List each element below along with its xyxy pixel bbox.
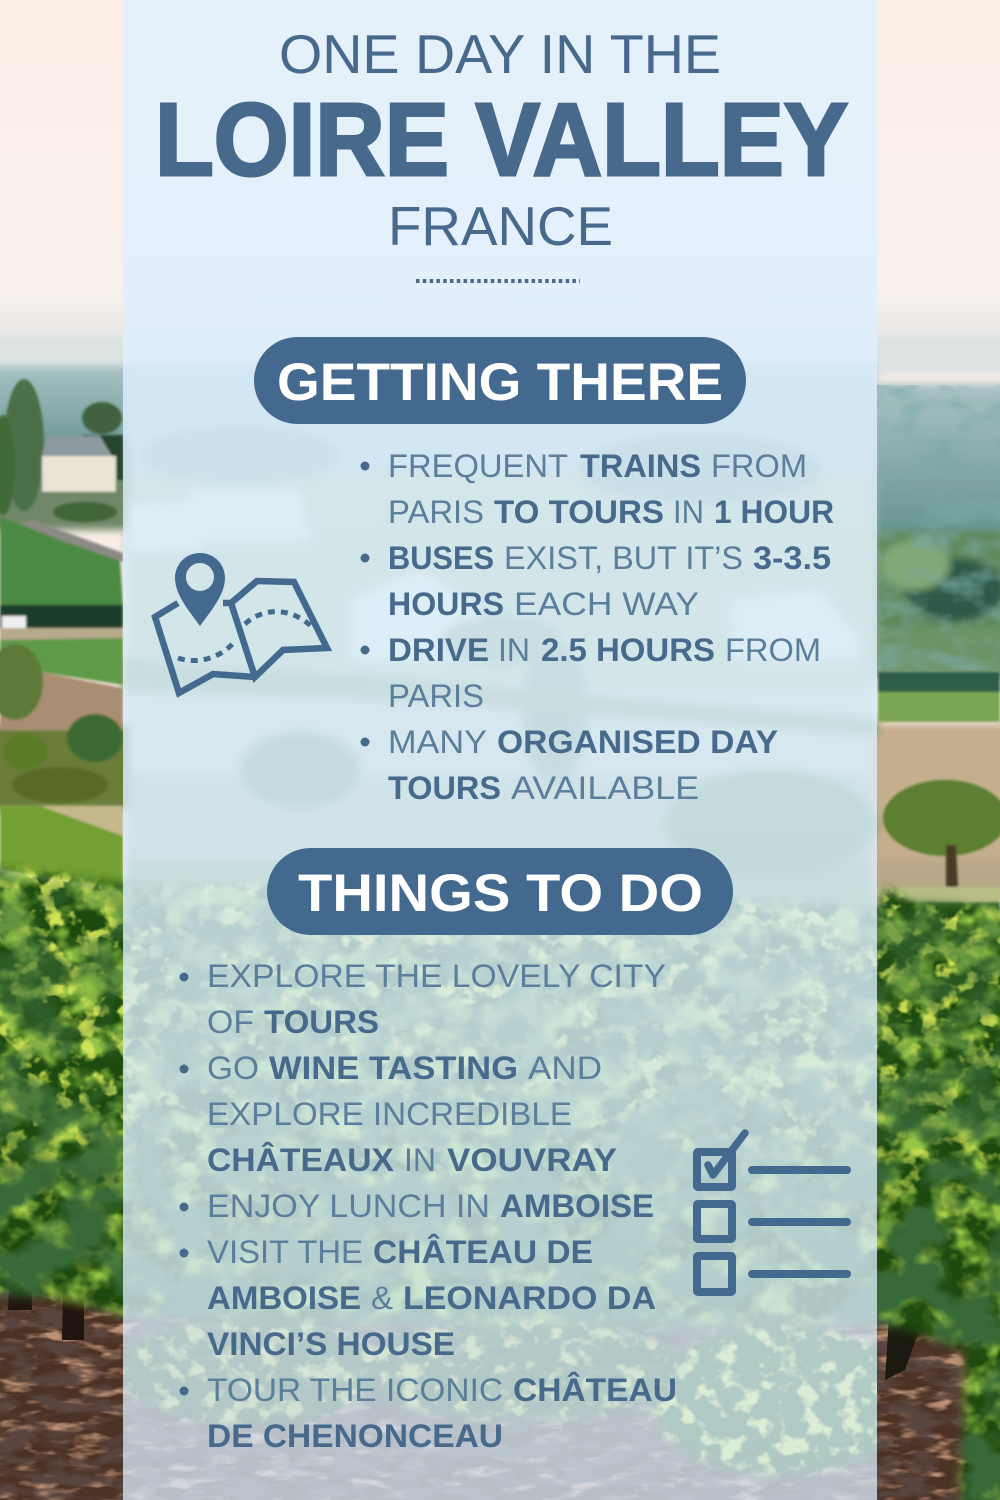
bullet 1: Tours: TOURS xyxy=(264,1004,379,1040)
bullet 1: trains xyxy=(360,448,834,530)
section heading: things to do xyxy=(267,848,733,935)
bullet 2: buses xyxy=(360,540,831,622)
bullet 4: day tours: AVAILABLE xyxy=(511,770,699,806)
bullet 3: drive: DRIVE xyxy=(388,632,489,668)
bullet 4: château de Amboise: & xyxy=(371,1280,393,1316)
section heading: things to do: THINGS TO DO xyxy=(298,864,703,923)
bullet 5: Chenonceau: TOUR THE ICONIC xyxy=(207,1372,503,1408)
bullet 1: Tours xyxy=(180,958,666,1040)
vine rows xyxy=(0,860,1000,1500)
bullet 1: trains: TRAINS xyxy=(580,448,701,484)
bullet 1: trains: IN xyxy=(673,494,704,530)
bullet 2: buses: EACH WAY xyxy=(514,586,699,622)
bullet 3: lunch: ENJOY LUNCH IN xyxy=(207,1188,490,1224)
bullet 4: château de Amboise: AMBOISE xyxy=(207,1280,361,1316)
bullet 4: château de Amboise xyxy=(180,1234,656,1362)
bullet 3: lunch xyxy=(180,1188,654,1224)
bullet 1: trains: TO TOURS xyxy=(494,494,664,530)
bullet 3: drive: FROM xyxy=(725,632,821,668)
bullet 4: château de Amboise: CHÂTEAU DE xyxy=(373,1234,593,1270)
background photo: vineyard landscape xyxy=(0,312,1000,1500)
bullet 1: Tours: OF xyxy=(207,1004,254,1040)
bullet 3: drive: PARIS xyxy=(388,678,484,714)
bullet 2: wine tasting: VOUVRAY xyxy=(447,1142,617,1178)
bullet 2: wine tasting: IN xyxy=(404,1142,436,1178)
bullet 2: wine tasting xyxy=(180,1050,617,1178)
bullet 4: château de Amboise: VINCI’S HOUSE xyxy=(207,1326,455,1362)
bullet 2: wine tasting: EXPLORE INCREDIBLE xyxy=(207,1096,572,1132)
title line: One day in the: ONE DAY IN THE xyxy=(279,23,721,85)
bullet 2: wine tasting: AND xyxy=(528,1050,602,1086)
bullet 2: buses: 3-3.5 xyxy=(753,540,831,576)
title line: France: FRANCE xyxy=(388,195,613,257)
icon: map with location pin xyxy=(155,553,327,693)
bullet 2: wine tasting: WINE TASTING xyxy=(269,1050,518,1086)
bullet 1: Tours: EXPLORE THE LOVELY CITY xyxy=(207,958,666,994)
title line: Loire Valley: LOIRE VALLEY xyxy=(155,82,848,197)
list: getting there xyxy=(360,448,834,806)
bullet 3: drive: IN xyxy=(498,632,530,668)
list: things to do xyxy=(180,958,677,1454)
bullet 2: buses: HOURS xyxy=(388,586,504,622)
bullet 4: château de Amboise: LEONARDO DA xyxy=(403,1280,656,1316)
bullet 1: trains: FROM xyxy=(711,448,807,484)
bullet 3: drive: 2.5 HOURS xyxy=(541,632,715,668)
bullet 4: day tours: TOURS xyxy=(388,770,501,806)
bullet 2: buses: BUSES xyxy=(388,540,494,576)
bullet 3: lunch: AMBOISE xyxy=(500,1188,654,1224)
bullet 4: day tours: MANY xyxy=(388,724,487,760)
section heading: getting there: GETTING THERE xyxy=(277,353,723,412)
bullet 2: wine tasting: GO xyxy=(207,1050,259,1086)
bullet 4: château de Amboise: VISIT THE xyxy=(207,1234,363,1270)
bullet 5: Chenonceau: DE CHENONCEAU xyxy=(207,1418,503,1454)
bullet 1: trains: PARIS xyxy=(388,494,484,530)
icon: checklist xyxy=(697,1133,847,1292)
bullet 2: buses: EXIST, BUT IT’S xyxy=(504,540,743,576)
section heading: getting there xyxy=(254,337,746,424)
dotted divider xyxy=(416,279,580,283)
background scene behind panel xyxy=(123,427,877,880)
bullet 4: day tours xyxy=(360,724,778,806)
title block xyxy=(155,23,848,257)
bullet 2: wine tasting: CHÂTEAUX xyxy=(207,1142,395,1178)
bullet 3: drive xyxy=(360,632,821,714)
bullet 5: Chenonceau xyxy=(180,1372,677,1454)
bullet 5: Chenonceau: CHÂTEAU xyxy=(513,1372,677,1408)
translucent central panel xyxy=(123,0,877,1500)
bullet 1: trains: FREQUENT xyxy=(388,448,568,484)
bullet 4: day tours: ORGANISED DAY xyxy=(497,724,778,760)
bullet 1: trains: 1 HOUR xyxy=(714,494,834,530)
